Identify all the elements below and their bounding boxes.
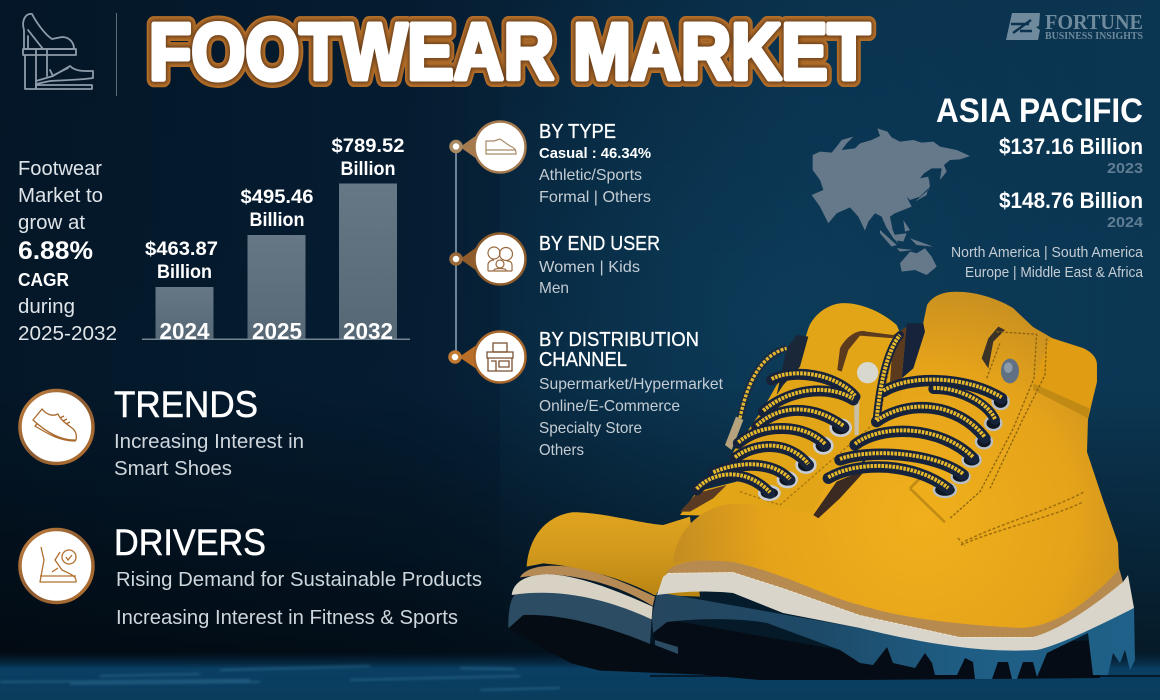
panel: Asia Pacific figures: North America | South America bbox=[951, 245, 1144, 261]
title: FOOTWEAR MARKET bbox=[149, 7, 870, 96]
title: FOOTWEAR MARKET bbox=[149, 7, 870, 96]
front boot details bbox=[813, 323, 1097, 522]
CAGR text block: 6.88% bbox=[18, 237, 93, 265]
logo: Fortune Business Insights: BUSINESS INSIGHTS bbox=[1045, 31, 1143, 42]
bar chart: Billion bbox=[340, 159, 396, 180]
segment: by type: BY TYPE bbox=[539, 121, 616, 143]
front boot eyelets bbox=[934, 394, 1009, 497]
segment: by type: Athletic/Sports bbox=[539, 167, 642, 184]
segment: by distribution channel: Supermarket/Hypermarket bbox=[539, 376, 724, 393]
panel: Asia Pacific figures: 2023 bbox=[1107, 160, 1143, 177]
back boot shaft bbox=[680, 303, 920, 518]
CAGR text block: Market to bbox=[18, 185, 103, 207]
icon: store badge bbox=[450, 332, 526, 382]
CAGR text block: during bbox=[18, 296, 75, 318]
back boot eyelets bbox=[759, 420, 851, 500]
icon: boot with check bbox=[20, 530, 93, 602]
bar chart bbox=[142, 136, 410, 344]
segment: by type: Casual : 46.34% bbox=[539, 145, 651, 162]
panel: Asia Pacific figures: ASIA PACIFIC bbox=[936, 92, 1143, 130]
bar chart: 2032 bbox=[343, 318, 393, 344]
panel: Asia Pacific figures: $137.16 Billion bbox=[999, 134, 1143, 159]
segment: by distribution channel: CHANNEL bbox=[539, 349, 627, 371]
panel: trends: Increasing Interest in bbox=[114, 430, 304, 453]
segment: by distribution channel bbox=[450, 329, 724, 459]
panel: drivers bbox=[20, 522, 482, 629]
CAGR text block: grow at bbox=[18, 212, 85, 234]
front boot sole bbox=[652, 560, 1135, 680]
segment: by type bbox=[451, 121, 651, 206]
bar chart: $789.52 bbox=[332, 136, 404, 157]
segment: by distribution channel: Online/E-Commerce bbox=[539, 398, 680, 415]
logo: Fortune Business Insights bbox=[1006, 10, 1143, 42]
icon: sneaker bbox=[20, 390, 93, 464]
icon: shoe badge bbox=[451, 122, 526, 172]
boots illustration bbox=[508, 292, 1135, 680]
back boot laces bbox=[697, 373, 855, 493]
front boot stitching bbox=[958, 492, 1084, 546]
bar chart: $463.87 bbox=[145, 239, 218, 260]
panel: trends: TRENDS bbox=[114, 384, 258, 425]
CAGR text block bbox=[18, 158, 117, 345]
logo: Fortune Business Insights: FORTUNE bbox=[1045, 10, 1143, 34]
segment connector line bbox=[455, 146, 457, 358]
panel: Asia Pacific figures: $148.76 Billion bbox=[999, 188, 1143, 213]
bar chart: 2024 bbox=[160, 318, 210, 344]
bar chart: $495.46 bbox=[240, 187, 314, 208]
segment: by distribution channel: BY DISTRIBUTION bbox=[539, 329, 699, 351]
segment: by distribution channel: Others bbox=[539, 442, 584, 459]
segment: by end user: BY END USER bbox=[539, 233, 660, 255]
bar chart: 2025 bbox=[252, 318, 302, 344]
panel: Asia Pacific figures: Europe | Middle East & Africa bbox=[965, 265, 1144, 281]
segment: by distribution channel: Specialty Store bbox=[539, 420, 642, 437]
back boot lace end bbox=[740, 348, 787, 418]
bar chart: Billion bbox=[250, 210, 304, 231]
segment: by end user: Women | Kids bbox=[539, 259, 640, 276]
CAGR text block: 2025-2032 bbox=[18, 323, 117, 345]
panel: drivers: DRIVERS bbox=[114, 522, 266, 563]
segment: by end user: Men bbox=[539, 280, 569, 297]
CAGR text block: CAGR bbox=[18, 270, 69, 290]
front boot upper bbox=[673, 292, 1119, 628]
bar chart: Billion bbox=[157, 262, 212, 283]
CAGR text block: Footwear bbox=[18, 158, 102, 180]
panel: drivers: Rising Demand for Sustainable Products bbox=[116, 568, 482, 591]
panel: trends bbox=[20, 384, 304, 480]
back boot bbox=[508, 512, 713, 675]
icon: shoes bbox=[23, 14, 93, 89]
title: FOOTWEAR MARKET bbox=[149, 7, 870, 96]
segment: by end user bbox=[451, 233, 660, 297]
map: Asia Pacific bbox=[812, 128, 970, 275]
segment: by type: Formal | Others bbox=[539, 189, 651, 206]
panel: trends: Smart Shoes bbox=[114, 457, 232, 480]
divider bbox=[116, 13, 117, 96]
panel: Asia Pacific figures bbox=[936, 92, 1144, 281]
panel: Asia Pacific figures: 2024 bbox=[1107, 214, 1144, 231]
front boot laces bbox=[828, 335, 1002, 489]
icon: family badge bbox=[451, 234, 526, 284]
panel: drivers: Increasing Interest in Fitness & Sports bbox=[116, 606, 458, 629]
